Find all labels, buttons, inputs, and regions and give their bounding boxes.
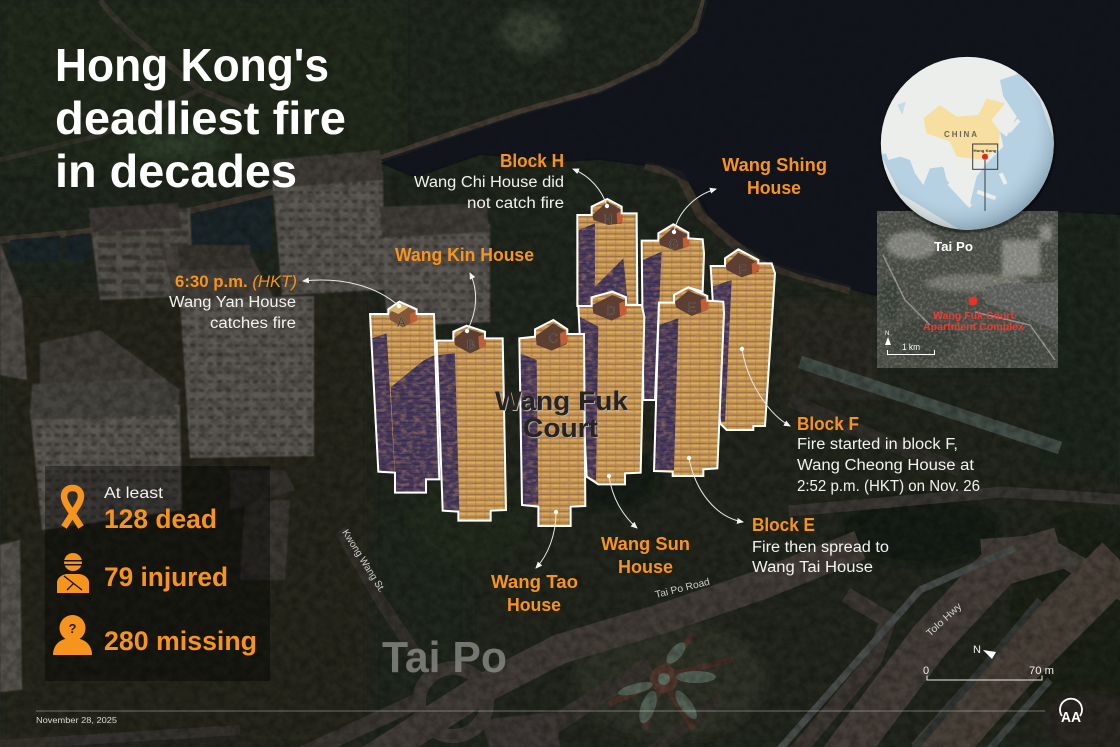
locator box and leader: Hong Kong bbox=[974, 149, 997, 153]
title: in decades bbox=[55, 145, 297, 197]
label: Wang Shing House: House bbox=[747, 178, 801, 198]
leader dots bbox=[397, 204, 744, 514]
stat: 280 missing: 280 missing bbox=[104, 626, 257, 656]
stat: 79 injured: 79 injured bbox=[104, 562, 228, 592]
noise barriers bbox=[800, 362, 1060, 448]
inset label: Wang Fuk Court Apartment Complex bbox=[923, 310, 1024, 333]
inset scale bar: N bbox=[885, 331, 889, 337]
locator box and leader bbox=[973, 144, 998, 211]
block B bbox=[437, 326, 506, 521]
callout: 6:30 p.m.: catches fire bbox=[210, 315, 296, 332]
scale bar and north arrow: 0 bbox=[923, 665, 929, 677]
block E bbox=[654, 287, 724, 476]
inset label: Tai Po: Tai Po bbox=[934, 239, 973, 254]
block F: F bbox=[738, 263, 746, 277]
scale bar and north arrow bbox=[923, 644, 1054, 680]
inset label: Wang Fuk Court Apartment Complex: Apartment Complex bbox=[923, 321, 1024, 333]
callout: Block F: Block F bbox=[797, 414, 859, 434]
block D bbox=[578, 292, 644, 484]
road label: Tolo Hwy: Tolo Hwy bbox=[925, 601, 964, 639]
block G: G bbox=[668, 238, 678, 252]
stats backdrop panel bbox=[45, 466, 270, 681]
label: Wang Fuk Court bbox=[495, 386, 629, 443]
block F bbox=[711, 249, 775, 430]
label: Wang Fuk Court: Wang Fuk bbox=[495, 386, 629, 416]
label: Wang Sun House bbox=[601, 534, 690, 577]
callout: Block E: Fire then spread to bbox=[752, 539, 889, 556]
callout: Block F: Fire started in block F, bbox=[797, 436, 958, 453]
stats: casualties bbox=[53, 485, 257, 656]
title: Hong Kong's bbox=[55, 39, 329, 91]
callout: 6:30 p.m. bbox=[169, 272, 297, 332]
callout: Block E bbox=[752, 515, 889, 576]
inset scale bar bbox=[885, 331, 934, 354]
label: Wang Sun House: Wang Sun bbox=[601, 534, 690, 554]
block E: E bbox=[687, 301, 696, 315]
block A bbox=[370, 302, 439, 493]
block G bbox=[642, 224, 704, 400]
stat: 128 dead bbox=[104, 485, 217, 534]
callout: 6:30 p.m.: Wang Yan House bbox=[169, 294, 296, 311]
roads bbox=[0, 400, 1120, 747]
stat: 128 dead: 128 dead bbox=[104, 504, 217, 534]
block H bbox=[577, 199, 637, 306]
callout: Block F: Wang Cheong House at bbox=[797, 457, 975, 474]
label: Wang Fuk Court: Court bbox=[523, 413, 598, 443]
callout: Block F bbox=[797, 414, 980, 495]
callout: Block E: Block E bbox=[752, 515, 815, 535]
icon: missing person bbox=[53, 615, 92, 655]
footer line bbox=[36, 710, 1045, 712]
inset label: Wang Fuk Court Apartment Complex: Wang Fuk Court bbox=[933, 310, 1015, 322]
icon: injured person bbox=[57, 553, 89, 593]
marker: fire location bbox=[968, 296, 978, 306]
globe label: China: CHINA bbox=[944, 130, 977, 139]
road label: Kwong Wang St.: Kwong Wang St. bbox=[339, 528, 387, 595]
title bbox=[55, 39, 346, 197]
label: Wang Kin House: Wang Kin House bbox=[395, 245, 534, 265]
scale bar and north arrow: N bbox=[973, 644, 981, 656]
block C: C bbox=[549, 332, 558, 346]
title: deadliest fire bbox=[55, 92, 346, 144]
inset scale bar: 1 km bbox=[902, 342, 920, 353]
icon: missing person: ? bbox=[69, 621, 77, 636]
callout: Block H: not catch fire bbox=[467, 195, 564, 212]
background towers bbox=[0, 150, 560, 747]
callout: Block H: Block H bbox=[500, 151, 564, 171]
scale bar and north arrow: 70 m bbox=[1029, 665, 1054, 677]
label: Wang Tao House: Wang Tao bbox=[491, 572, 578, 592]
callout: Block H bbox=[414, 151, 564, 212]
label: Wang Sun House: House bbox=[618, 557, 673, 577]
label: Wang Shing House: Wang Shing bbox=[722, 155, 827, 175]
road label: Tai Po Road: Tai Po Road bbox=[654, 577, 711, 601]
China bbox=[923, 98, 1005, 160]
southeast asia and islands bbox=[942, 166, 944, 168]
logo: AA bbox=[1060, 699, 1082, 726]
stat: 128 dead: At least bbox=[104, 485, 164, 502]
logo: AA: AA bbox=[1061, 709, 1081, 726]
map label: Tai Po: Tai Po bbox=[382, 633, 507, 682]
oceans bbox=[881, 73, 1055, 230]
inset map: Tai Po bbox=[877, 211, 1060, 368]
locator globe bbox=[880, 57, 1056, 233]
water wash bbox=[380, 0, 1120, 303]
label: Wang Tao House: House bbox=[507, 595, 561, 615]
callout: 6:30 p.m.: 6:30 p.m. (HKT) bbox=[175, 272, 297, 291]
label: Wang Tao House bbox=[491, 572, 578, 615]
callout: Block E: Wang Tai House bbox=[752, 559, 873, 576]
water shape bbox=[377, 0, 1120, 305]
block D: D bbox=[606, 304, 616, 318]
callout: Block F: 2:52 p.m. (HKT) on Nov. 26 bbox=[797, 478, 980, 495]
date: November 28, 2025 bbox=[36, 715, 117, 725]
block A: A bbox=[397, 316, 406, 330]
block C bbox=[519, 320, 585, 526]
block B: B bbox=[467, 338, 475, 352]
icon: ribbon bbox=[64, 488, 81, 527]
label: Wang Shing House bbox=[722, 155, 827, 198]
leader lines with arrows bbox=[303, 169, 790, 568]
Wang Fuk Court blocks bbox=[370, 199, 775, 526]
callout: Block H: Wang Chi House did bbox=[414, 174, 564, 191]
block H: H bbox=[603, 212, 612, 226]
garden bbox=[609, 634, 734, 729]
